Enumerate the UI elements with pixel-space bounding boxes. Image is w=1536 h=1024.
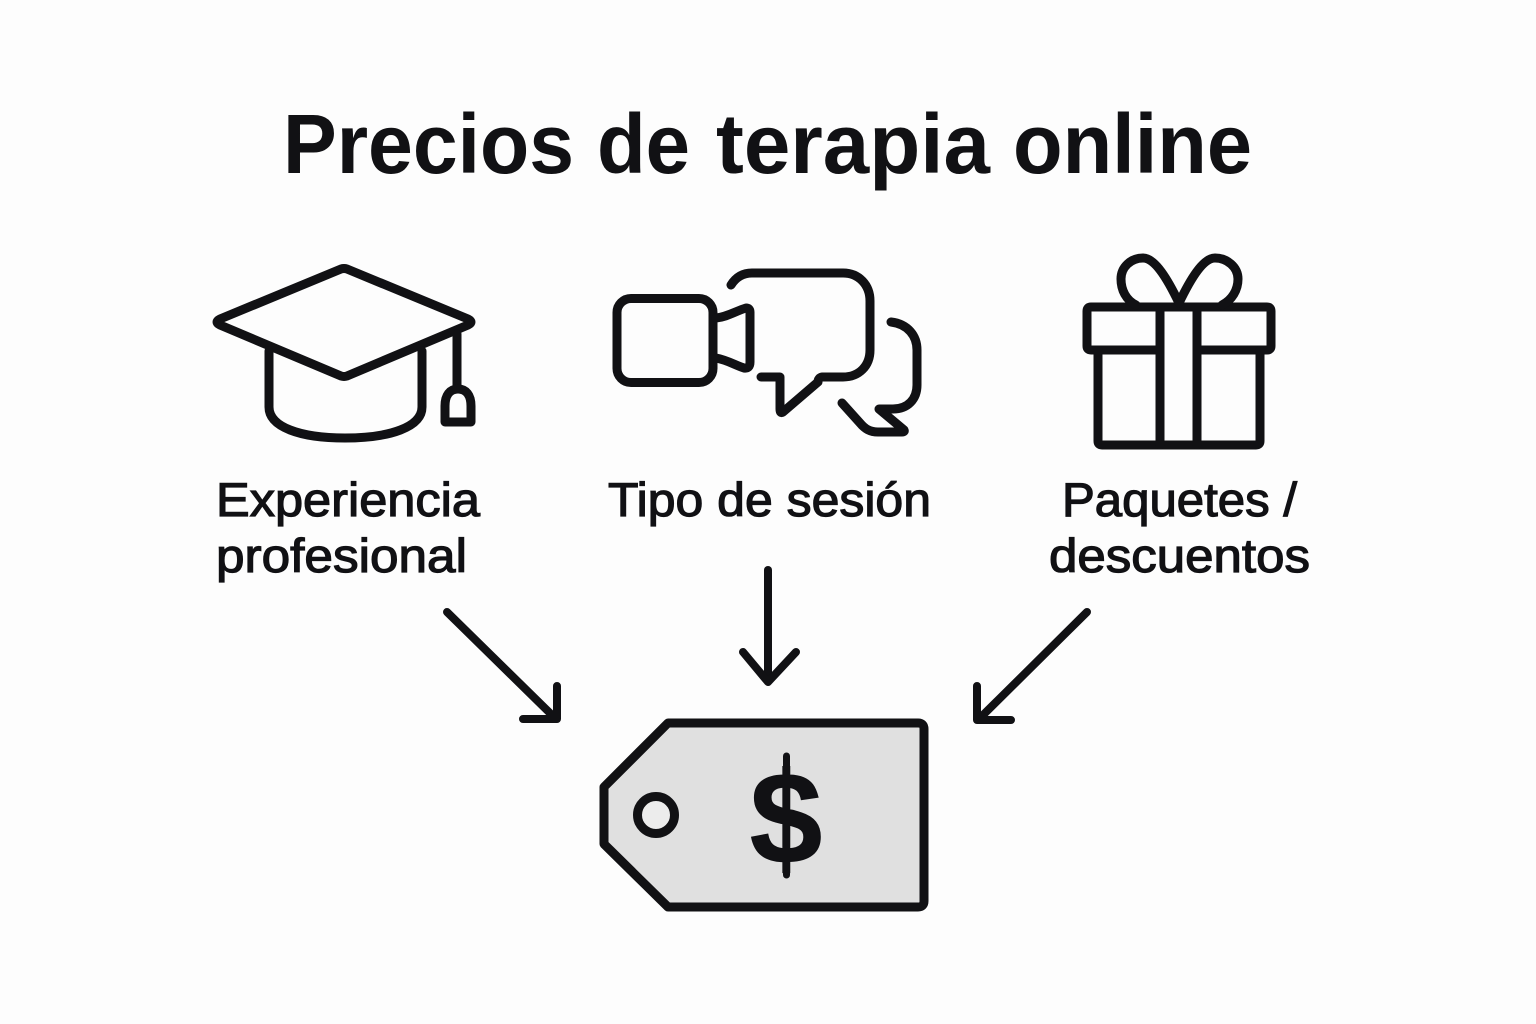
arrow: right — [977, 612, 1087, 720]
arrow: center — [743, 570, 796, 682]
arrow: left — [447, 612, 557, 719]
title: de — [597, 97, 690, 191]
label: paquetes descuentos — [1049, 473, 1310, 582]
tag hole — [638, 796, 674, 834]
icon: gift box — [1087, 258, 1271, 445]
tag shape — [604, 723, 924, 907]
label: experiencia profesional: profesional — [216, 529, 467, 582]
icon: graduation cap — [217, 268, 471, 438]
title: Precios — [283, 97, 574, 191]
title: online — [1013, 97, 1252, 191]
price tag — [604, 723, 924, 907]
label: tipo de sesion: Tipo de sesión — [608, 473, 931, 526]
dollar sign: $ — [750, 745, 822, 891]
title: terapia — [716, 97, 991, 191]
label: experiencia profesional — [216, 473, 481, 582]
label: paquetes descuentos: descuentos — [1049, 529, 1310, 582]
label: paquetes descuentos: Paquetes / — [1062, 473, 1298, 526]
icon: video camera and speech bubbles — [617, 273, 917, 432]
label: experiencia profesional: Experiencia — [216, 473, 481, 526]
